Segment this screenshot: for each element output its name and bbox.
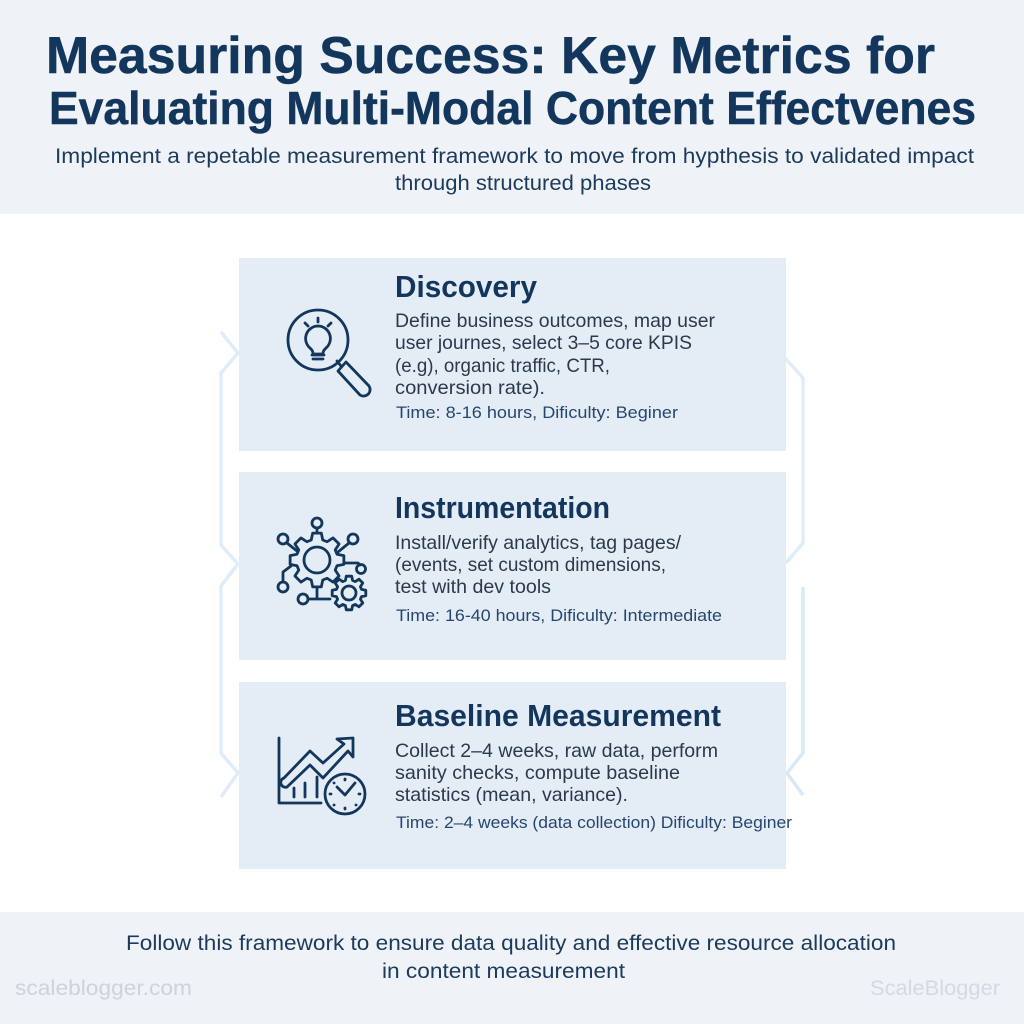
- right connector: discovery to instrumentation: [785, 358, 803, 563]
- footer message: Follow this framework to ensure data quality and effective resource allocation: [126, 931, 896, 955]
- title: Measuring Success: Key Metrics for: [46, 26, 935, 84]
- description: test with dev tools: [395, 576, 551, 598]
- watermark: ScaleBlogger: ScaleBlogger: [870, 976, 1000, 1000]
- footer message: in content measurement: [382, 959, 625, 983]
- time and difficulty: Time: 16-40 hours, Dificulty: Intermediate: [396, 606, 722, 625]
- header band: [0, 0, 1024, 214]
- right connector: instrumentation to baseline: [787, 587, 803, 795]
- left connector: [221, 332, 238, 797]
- footer message: [126, 931, 896, 983]
- panel: instrumentation: [239, 472, 786, 660]
- time and difficulty: Time: 8-16 hours, Dificulty: Beginer: [396, 403, 678, 422]
- description: [395, 532, 682, 598]
- panel: baseline measurement: [239, 682, 792, 869]
- time and difficulty: Time: 2–4 weeks (data collection) Dificulty: Beginer: [396, 813, 792, 832]
- icon: growth chart with clock: [279, 738, 365, 814]
- description: Define business outcomes, map user: [395, 310, 716, 332]
- description: [395, 740, 718, 806]
- description: (e.g), organic traffic, CTR,: [395, 355, 610, 377]
- title: [46, 26, 976, 134]
- subtitle: through structured phases: [395, 171, 651, 195]
- description: statistics (mean, variance).: [395, 784, 628, 806]
- subtitle: Implement a repetable measurement framework to move from hypthesis to validated impact: [55, 144, 974, 168]
- description: Install/verify analytics, tag pages/: [395, 532, 682, 554]
- description: [395, 310, 716, 399]
- heading: Instrumentation: Instrumentation: [395, 491, 610, 525]
- description: conversion rate).: [395, 377, 545, 399]
- icon: gears and circuit nodes: [278, 518, 366, 610]
- heading: Discovery: Discovery: [395, 270, 537, 304]
- icon: magnifier with lightbulb: [288, 310, 370, 396]
- panel: discovery: [239, 258, 786, 451]
- title: Evaluating Multi-Modal Content Effectvenes: [49, 82, 976, 134]
- footer band: [0, 912, 1024, 1024]
- description: (events, set custom dimensions,: [395, 554, 666, 576]
- description: Collect 2–4 weeks, raw data, perform: [395, 740, 718, 762]
- watermark: scaleblogger.com: scaleblogger.com: [15, 976, 192, 1000]
- heading: Baseline Measurement: Baseline Measurement: [395, 699, 721, 733]
- description: user journes, select 3–5 core KPIS: [395, 332, 692, 354]
- subtitle: [55, 144, 974, 195]
- description: sanity checks, compute baseline: [395, 762, 680, 784]
